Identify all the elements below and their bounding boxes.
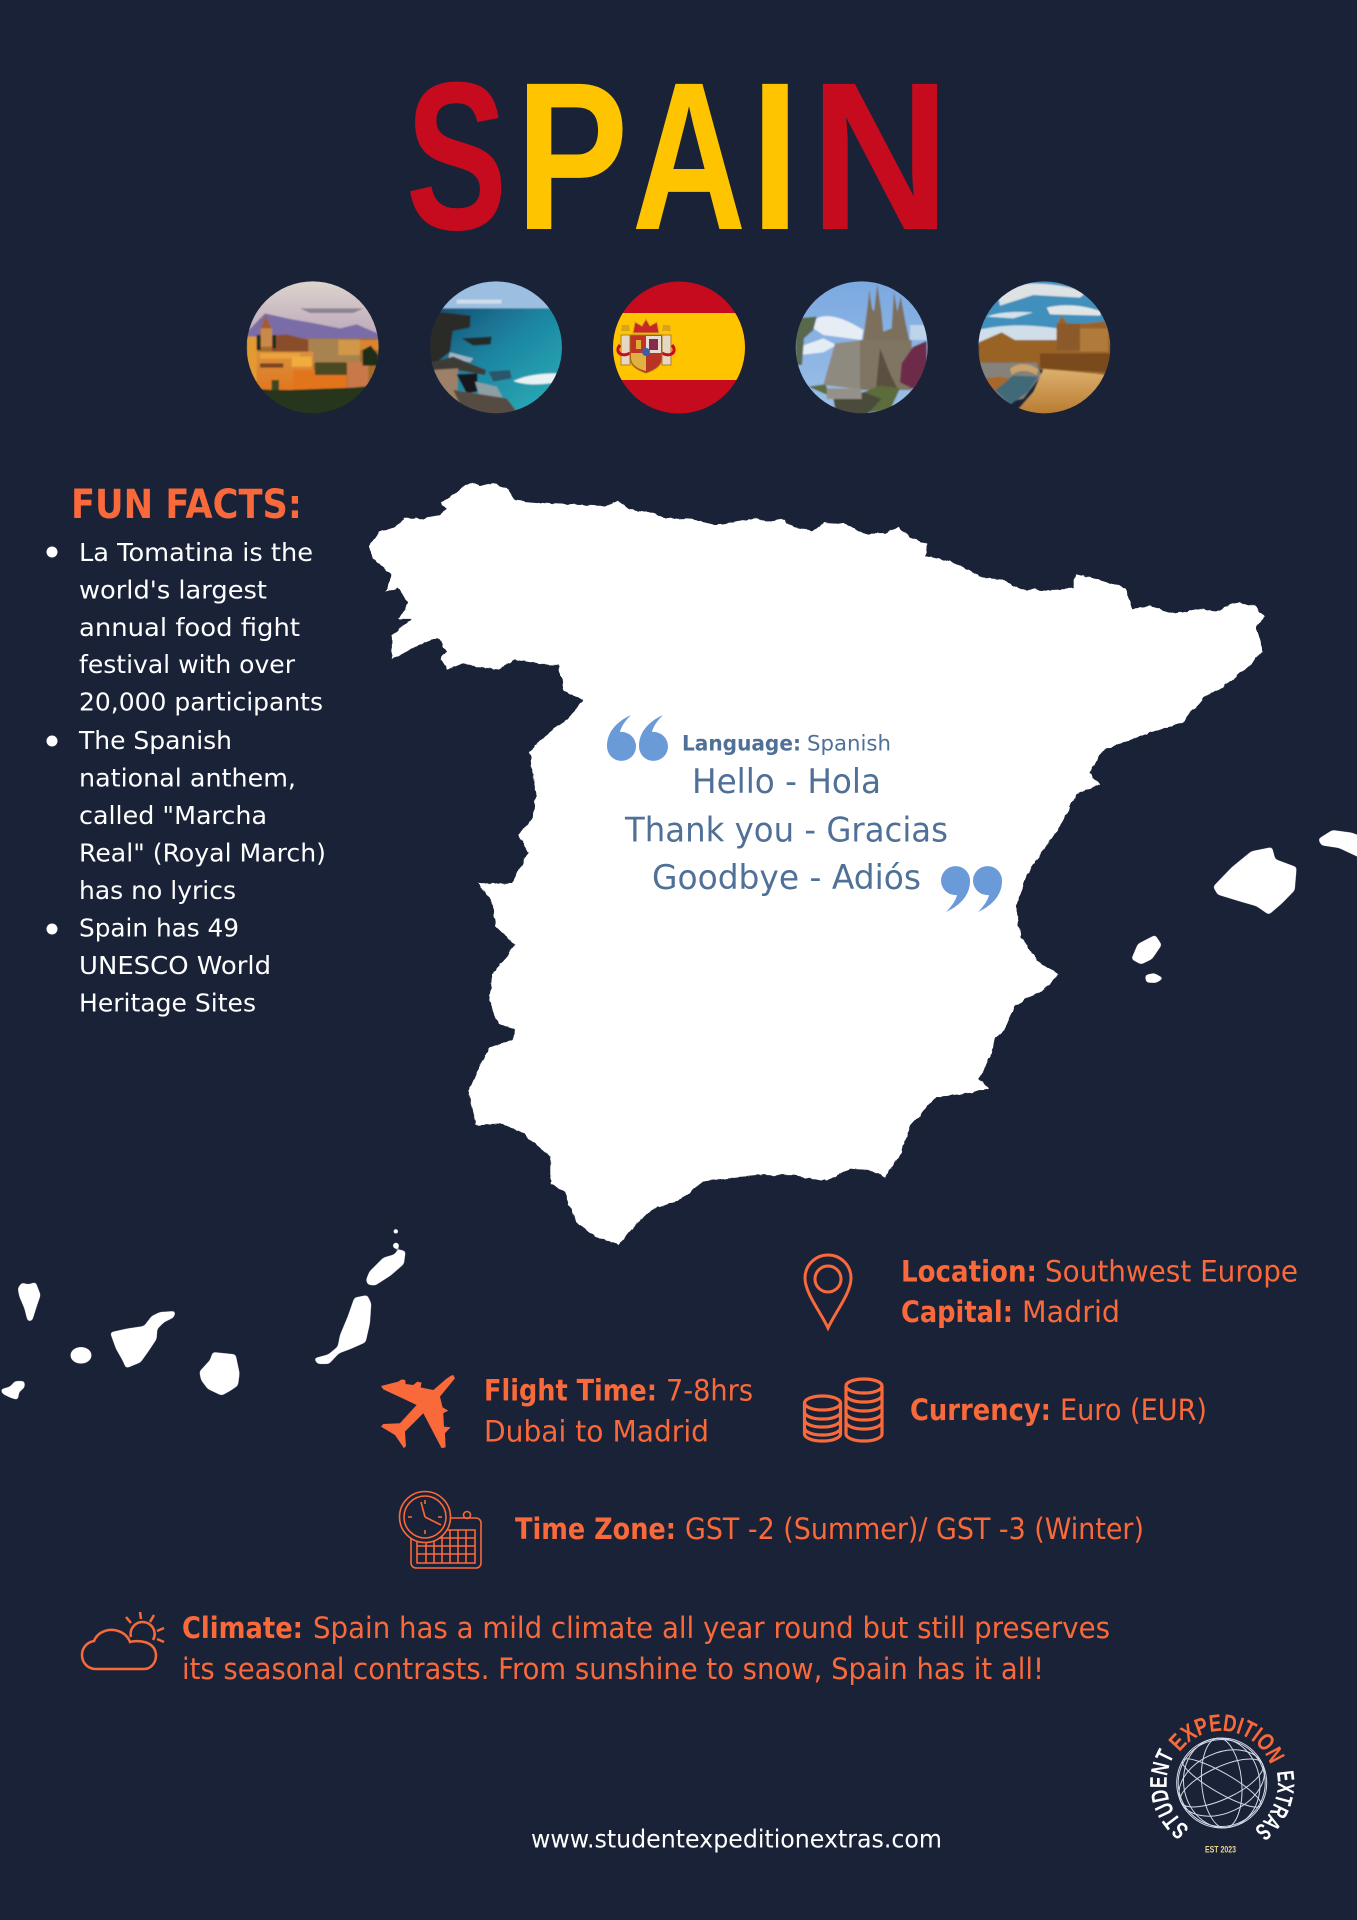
bullet list: annual food fight xyxy=(79,613,300,642)
bullet list: Heritage Sites xyxy=(79,988,256,1018)
text: climate: Spain has a mild climate all year round but still preserves xyxy=(313,1611,1110,1645)
title: SPAIN xyxy=(406,37,950,274)
icon: clock and calendar xyxy=(400,1492,481,1568)
text: curved logo lettering: EXPEDITION xyxy=(1168,1714,1285,1764)
bullet list: world's largest xyxy=(79,576,267,604)
bullet list: Spain has 49 xyxy=(79,914,239,942)
text: phrases: Goodbye - Adiós xyxy=(652,858,921,898)
title: SPAIN: S xyxy=(406,38,507,274)
text: curved logo lettering: EXTRAS xyxy=(1256,1770,1294,1840)
title: SPAIN: P xyxy=(516,39,628,274)
text: time zone: GST -2 (Summer)/ GST -3 (Winter) xyxy=(685,1512,1144,1546)
bullet list: festival with over xyxy=(79,650,296,679)
icon: coins xyxy=(804,1379,882,1441)
bullet list: national anthem, xyxy=(79,764,296,792)
photo: turquoise coast xyxy=(430,281,562,414)
icon: coat of arms xyxy=(618,319,674,373)
text: language label: Language: xyxy=(682,732,801,756)
bullet list xyxy=(46,538,326,1018)
text: flight time: Flight Time: xyxy=(484,1374,657,1408)
text: phrases: Thank you - Gracias xyxy=(624,810,948,850)
text: curved logo lettering: STUDENT xyxy=(1150,1748,1188,1838)
text: curved logo lettering xyxy=(1150,1714,1294,1854)
photo: Alhambra at sunset xyxy=(246,281,379,414)
text: flight time: Dubai to Madrid xyxy=(484,1414,709,1448)
map: Canary Islands xyxy=(0,1229,406,1400)
text: climate: Climate: xyxy=(182,1611,303,1645)
panel: time zone xyxy=(400,1492,1144,1568)
panel: currency xyxy=(804,1379,1207,1441)
text: curved logo lettering: EST 2023 xyxy=(1205,1844,1236,1854)
text: location and capital: Location: xyxy=(901,1254,1037,1288)
text: climate: its seasonal contrasts. From sunshine to snow, Spain has it all! xyxy=(182,1652,1044,1686)
text: language label: Spanish xyxy=(807,732,891,756)
text: time zone xyxy=(515,1512,1144,1546)
bullet list: The Spanish xyxy=(78,726,232,755)
panel: location xyxy=(805,1254,1298,1329)
bullet list: called "Marcha xyxy=(79,801,267,830)
panel: flight time xyxy=(381,1374,753,1448)
text: time zone: Time Zone: xyxy=(515,1512,676,1546)
photo: Plaza de España Seville xyxy=(977,278,1113,418)
title: SPAIN: I xyxy=(750,39,800,274)
panel: fun facts xyxy=(46,482,326,1018)
icon: airplane xyxy=(381,1375,455,1448)
text: currency xyxy=(910,1393,1207,1427)
panel: language quote xyxy=(607,715,1002,912)
text: currency: Euro (EUR) xyxy=(1060,1393,1207,1427)
text: climate xyxy=(182,1611,1110,1686)
bullet list: UNESCO World xyxy=(79,951,271,980)
icon: wireframe globe xyxy=(1168,1732,1275,1834)
text: phrases: Hello - Hola xyxy=(692,762,881,802)
text: flight time: 7-8hrs xyxy=(666,1374,753,1408)
photo: Sagrada Familia xyxy=(793,278,930,418)
icon: opening quotation mark xyxy=(607,715,668,761)
heading: fun facts: FUN FACTS: xyxy=(71,482,302,528)
bullet list: 20,000 participants xyxy=(79,688,323,716)
panel: climate xyxy=(82,1611,1110,1686)
icon: cloud and sun xyxy=(82,1612,164,1669)
text: location and capital: Madrid xyxy=(1022,1295,1120,1329)
text: website: www.studentexpeditionextras.com xyxy=(531,1824,942,1854)
icon: map pin xyxy=(805,1255,851,1328)
text: language label xyxy=(682,732,891,756)
map: Balearic Islands xyxy=(1131,830,1357,983)
icon: closing quotation mark xyxy=(941,866,1002,912)
text: currency: Currency: xyxy=(910,1393,1051,1427)
text: location and capital: Southwest Europe xyxy=(1045,1254,1298,1288)
text: phrases xyxy=(624,762,948,898)
text: location and capital: Capital: xyxy=(901,1295,1013,1329)
bullet list: has no lyrics xyxy=(79,876,236,905)
bullet list: La Tomatina is the xyxy=(79,538,313,567)
photo: Spanish flag with coat of arms xyxy=(610,280,750,415)
title: SPAIN: A xyxy=(632,38,746,274)
logo: Student Expedition Extras xyxy=(1150,1714,1294,1854)
title: SPAIN: N xyxy=(810,37,950,274)
map: mainland Spain xyxy=(369,482,1264,1244)
text: flight time xyxy=(484,1374,753,1448)
text: location and capital xyxy=(901,1254,1298,1329)
bullet list: Real" (Royal March) xyxy=(79,838,326,868)
